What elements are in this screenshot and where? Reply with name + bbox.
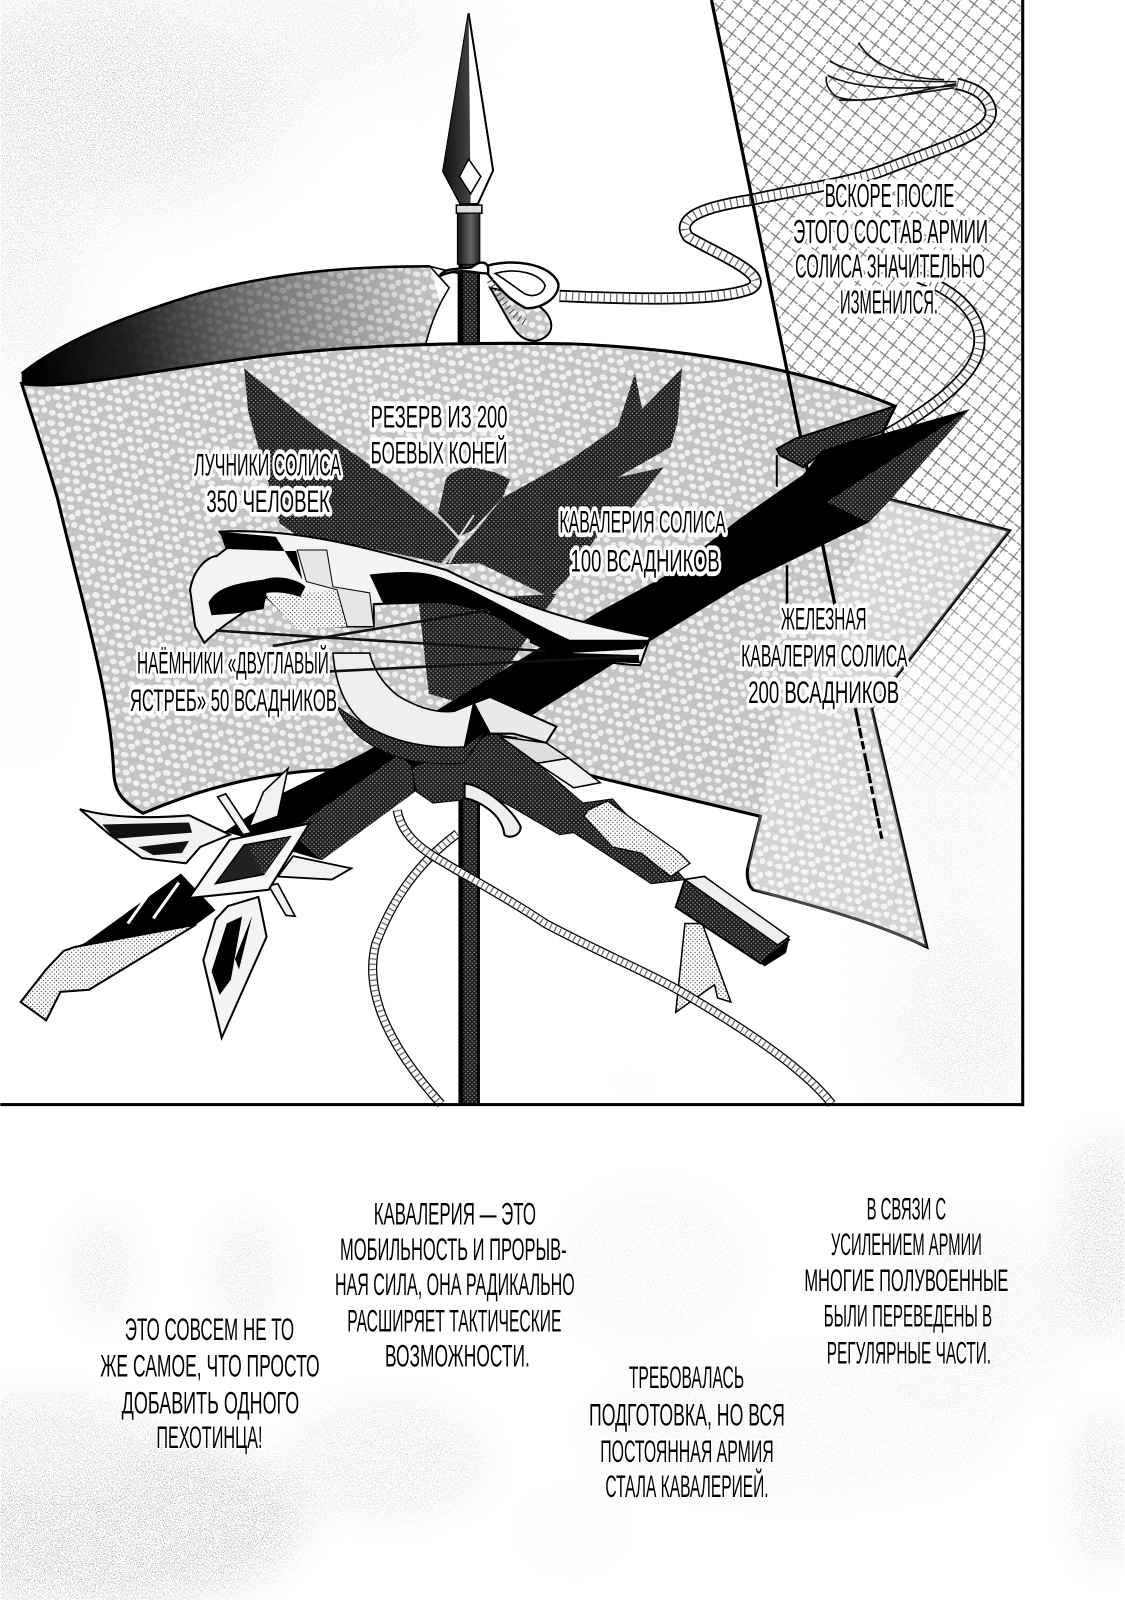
net-textured sky panel (711, 0, 1021, 816)
label: reserve horses: РЕЗЕРВ ИЗ 200 (371, 399, 507, 435)
right wing (278, 856, 351, 880)
label: mercenaries: ЯСТРЕБ» 50 ВСАДНИКОВ (130, 682, 337, 718)
caption: training required: СТАЛА КАВАЛЕРИЕЙ. (605, 1468, 769, 1504)
label: mercenaries (130, 644, 337, 718)
label: archers: ЛУЧНИКИ СОЛИСА (194, 447, 342, 483)
caption: army changed (793, 178, 988, 321)
left wing (80, 809, 230, 863)
caption: cavalry is mobility: КАВАЛЕРИЯ — ЭТО (374, 1195, 536, 1231)
caption: regular units: В СВЯЗИ С (867, 1190, 946, 1226)
label: reserve horses (371, 399, 507, 470)
label: archers: 350 ЧЕЛОВЕК (206, 483, 330, 519)
caption: cavalry is mobility: НАЯ СИЛА, ОНА РАДИКАЛЬНО (335, 1266, 575, 1302)
arrow: shaft and head (225, 409, 970, 860)
diamond (189, 823, 309, 898)
eagle emblem (244, 368, 682, 704)
crossbow horn and crescent (333, 653, 556, 764)
caption: not just one infantryman: ЖЕ САМОЕ, ЧТО ПРОСТО (100, 1348, 320, 1384)
crossbow body (190, 531, 650, 665)
caption: training required: ТРЕБОВАЛАСЬ (629, 1359, 744, 1395)
caption: cavalry is mobility: РАСШИРЯЕТ ТАКТИЧЕСКИЕ (347, 1303, 561, 1339)
label: iron cavalry: КАВАЛЕРИЯ СОЛИСА (741, 637, 908, 673)
crossbow strings (216, 610, 639, 671)
winged ornament and fletching (21, 768, 351, 1038)
label: iron cavalry: 200 ВСАДНИКОВ (748, 674, 899, 710)
right fold of banner (777, 406, 895, 487)
caption: cavalry is mobility: МОБИЛЬНОСТЬ И ПРОРЫВ- (340, 1231, 567, 1267)
caption: training required: ПОДГОТОВКА, НО ВСЯ (589, 1397, 785, 1433)
lower ropes (373, 810, 832, 1104)
banner: back fold with dark gradient (22, 266, 441, 386)
caption: not just one infantryman: ЭТО СОВСЕМ НЕ ТО (125, 1311, 294, 1347)
panel border (0, 0, 1024, 1106)
spear (443, 13, 493, 1104)
caption: training required (589, 1359, 785, 1504)
label: mercenaries: НАЁМНИКИ «ДВУГЛАВЫЙ (137, 644, 329, 680)
lower blade (203, 897, 267, 1038)
caption: not just one infantryman: ПЕХОТИНЦА! (156, 1419, 263, 1455)
label: reserve horses: БОЕВЫХ КОНЕЙ (371, 434, 507, 470)
caption: regular units (804, 1190, 1008, 1370)
crossbow (190, 531, 789, 966)
banner: main stone-textured field (22, 343, 1009, 947)
caption: not just one infantryman: ДОБАВИТЬ ОДНОГО (122, 1384, 299, 1420)
caption: cavalry is mobility: ВОЗМОЖНОСТИ. (385, 1337, 530, 1373)
caption: cavalry is mobility (335, 1195, 575, 1373)
label: Solis cavalry: КАВАЛЕРИЯ СОЛИСА (559, 504, 726, 540)
diagonal banner edge lines (711, 0, 882, 839)
label: archers (194, 447, 342, 519)
caption: army changed: ВСКОРЕ ПОСЛЕ (825, 178, 954, 215)
crossbow stock (411, 734, 789, 966)
caption: army changed: ИЗМЕНИЛСЯ. (840, 284, 938, 321)
caption: not just one infantryman (100, 1311, 320, 1455)
caption: training required: ПОСТОЯННАЯ АРМИЯ (600, 1433, 774, 1469)
upper spikes (218, 768, 295, 916)
upper rope and tassel (559, 43, 991, 437)
crossbow trigger (465, 784, 521, 837)
label: iron cavalry (741, 601, 908, 710)
label: Solis cavalry: 100 ВСАДНИКОВ (571, 542, 720, 578)
label: iron cavalry: ЖЕЛЕЗНАЯ (781, 601, 867, 637)
ribbon knot on spear (426, 262, 558, 344)
label: Solis cavalry (559, 504, 726, 578)
arrow tail (21, 873, 216, 1020)
crossbow tail ribbon (676, 923, 731, 1012)
